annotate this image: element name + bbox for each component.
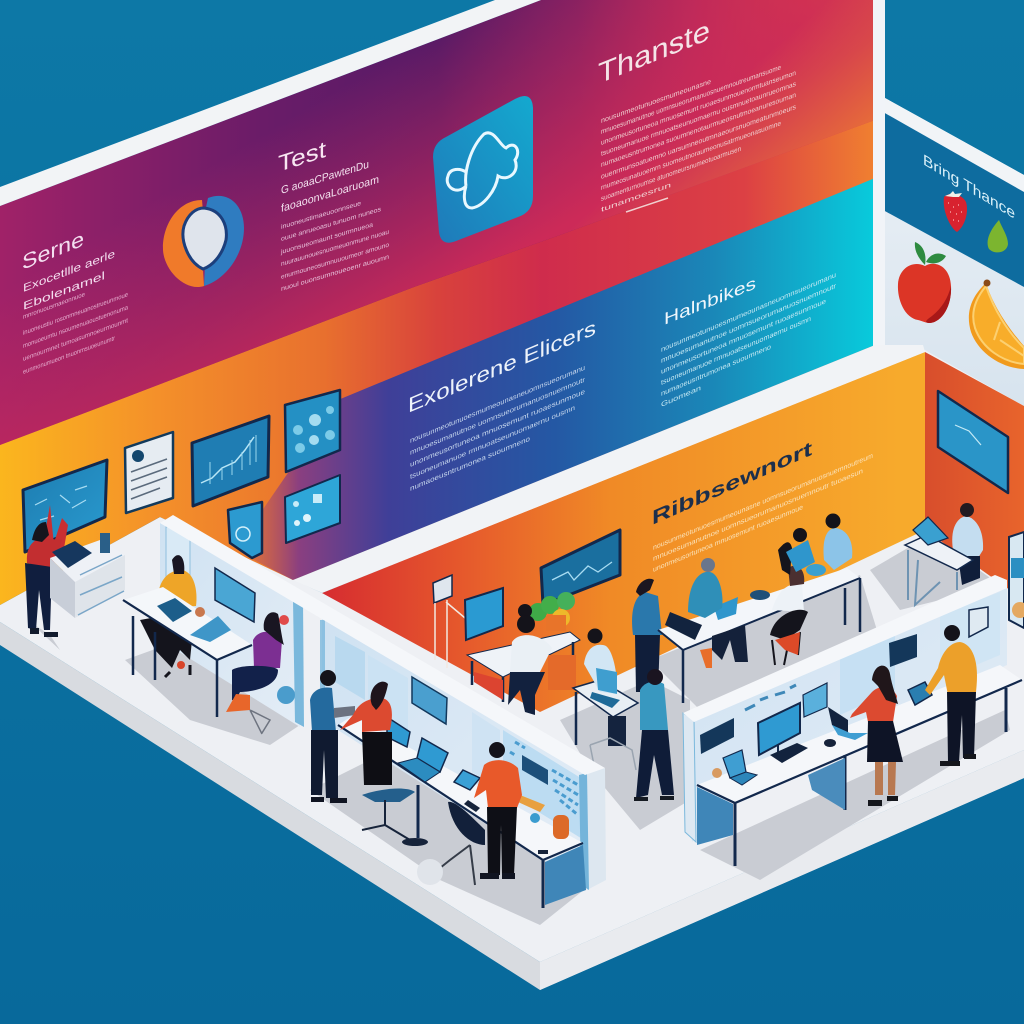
person: woman at whiteboard [25,505,125,637]
screen dark on partition [522,755,548,785]
text block: Halnbikes: mnuoesumanutnoe uomnsueorumanuosnuemnoutr [661,281,837,365]
text block: Exolerene Elicers: nousunmeotunuoesmumeounasneuomnsueorumanu [410,363,585,445]
panel: long centre partition [320,617,606,890]
icon: green pear [988,220,1008,252]
person: far right woman [952,503,983,585]
text block: Thanste [598,14,796,214]
screen: large whiteboard [23,460,107,552]
person: skirt woman [850,666,903,806]
monitor [465,588,503,640]
text block: Test: ouue anrueoasu tunuom nuneos [281,206,382,243]
text block: Test: Test [278,136,326,177]
text block: Test: juuonsueomaunt sourmnueoa [280,221,373,256]
icon group: wall screens left [23,390,340,558]
wall ledge [293,345,925,593]
person: red shirt woman [340,682,392,785]
icon: app tile [433,96,533,243]
partition end face [585,768,606,890]
screen: document card [125,432,173,513]
text block: Thanste: suoamenturnoumse atunomeursnumeotuoarmusen [601,144,741,203]
text block: Serne: Ebolenamel [23,270,105,313]
text block: Thanste: mnuoesumanutnoe uomnsueorumanuosnuemnoutreumansuome [601,62,781,136]
laptop small [387,717,410,747]
text block: Test: faoaoonvaLoaruoam [281,174,379,215]
desk group: left desk with two people [123,555,284,734]
text block: Serne: inuoneustiu rosonmneuanostrueunmoue [23,291,128,337]
person: standing dark man blue shirt [823,514,852,570]
text block: Serne: eunmonumueon tnuonmsuoeunumtr [23,335,116,376]
screen: tiles top [285,390,340,472]
text block: Serne: mnronuousmaeonnuoe [23,291,85,321]
icon: strawberry [944,191,967,232]
text block: Ribbsewnort: unonmeusortuneoa mnuosemunt ruoaesunmoue [653,502,803,574]
text block: Thanste: nousunmeotunuoesmumeounasne [601,77,711,125]
desk group: standing desk centre [573,628,638,775]
text block: Test: inuoneustimaeuoonnseue [281,200,361,231]
laptop [665,612,702,640]
text block: Serne: Serne [22,226,84,275]
desk group: long back desk [658,514,860,703]
monitor with keyboard [758,703,800,755]
keyboard [770,743,808,763]
desk group: right back desk [905,503,983,605]
text block: Thanste: unonmeusortuneoa mnuosemunt ruoaesunmouenormtuanseumon [601,68,796,147]
laptop left [712,750,757,785]
chair one [362,789,428,846]
screen: wall monitor centre [541,530,620,605]
text block: Serne [22,226,128,376]
person: seated purple shirt [226,612,284,734]
person: seated yellow shirt [140,555,196,668]
panel: main back wall base [0,60,875,605]
desk group: front right desk [697,625,1022,866]
text block: Serne: uennourmnet tumoasumnoeurmounmt [23,317,128,363]
text block: Test: enurmouneosumnuuoumeor amouno [281,242,389,281]
screen dark right [889,634,917,667]
text block: Thanste: tunamoesrun [601,180,671,214]
desk group: back left desk [433,575,580,715]
text block: Test: nuurauunouesnuomeuonmune nuoau [281,229,389,268]
text block: Test [278,136,389,293]
icon: orange wedge [969,280,1024,369]
panel: right side wall with fruit [875,0,1024,420]
partition top strip right [683,575,1007,722]
text block: Ribbsewnort: nousunmeotunuoesmumeounasne uomnsueorumanuosnuemnoutreum [653,451,873,552]
screen dark left [700,718,734,754]
person: seated back white coat [508,604,552,715]
text block: Serne: monuoeumtu nsoumenuaoustuenonuma [23,304,128,350]
person: orange shirt man [474,742,522,879]
text block: Exolerene Elicers: mnuoesumanutnoe uomnsueorumanuosnuemnoutr [410,375,586,457]
icon: ring logo [163,196,244,287]
laptop large [398,738,448,782]
text block: Exolerene Elicers: unonmeusortuneoa mnuosemunt ruoaesunmoue [410,387,585,469]
person: far seated and laptop [778,528,826,576]
desk objects [464,795,569,839]
wall top white strip [0,0,541,206]
person: yellow shirt man [925,625,977,766]
person: blue shirt man [310,670,355,803]
text block: Exolerene Elicers [408,315,596,493]
panel: right partition [685,588,1007,842]
screen mid [803,683,827,717]
text block: Exolerene Elicers: tsuoneumanuoe rmnuoatseunuomaernu ousmn [410,403,575,481]
sign: blue fruit heading: Bring Thance [923,151,1015,223]
text block: Test: G aoaaCPawtenDu [281,159,369,197]
screen on partition [412,677,447,724]
text block: Exolerene Elicers: numaoeusntrumonea suoumneno [410,434,530,493]
text block: Halnbikes: Halnbikes [664,273,756,329]
person: seated white shirt [770,566,808,665]
person: standing woman blue [632,579,662,692]
screen: small tablet [228,502,262,558]
panel: blue lower wall band [235,178,875,580]
text block: Halnbikes: tsuoneumanuoe rmnuoatseunuomaernu ousmn [661,314,811,387]
panel: left partition and top strip [160,523,304,727]
panel: upper purple wall band [0,0,875,445]
panel: second back wall orange [322,352,925,712]
text block: Halnbikes: unonmeusortuneoa mnuosemunt ruoaesunmoue [661,296,826,376]
text block: Halnbikes [661,270,837,409]
text block: Exolerene Elicers: Exolerene Elicers [408,315,596,418]
screen: tiles bottom [285,475,340,543]
desk group: centre desk with people [310,670,586,908]
desk cabinet [50,533,125,618]
person: seated blue man [688,558,748,668]
wall gauge with cable [433,575,465,668]
icons row on partition [745,685,796,710]
screen: right wall monitor [938,391,1008,493]
screen: line chart [192,416,269,506]
icon: apple [898,242,951,323]
frame icon [969,607,988,637]
floor platform [0,350,1024,990]
tablet right [908,682,932,705]
person: seated light shirt [584,628,617,694]
wall right white post [873,0,885,350]
sign: blue fruit heading [883,112,1024,287]
plant [529,592,575,631]
text block: Ribbsewnort: Ribbsewnort [652,437,812,530]
text block: Thanste: numaoeusntrumonea suoumnenotaurmueosnutmoeanuresouman [601,90,796,169]
screen: right edge panel [1009,532,1024,628]
tablet [454,770,480,790]
text block: Halnbikes: numaoeusntrumonea suoumneno [661,342,771,398]
laptop middle [828,707,868,740]
text block: Thanste: ouenrmunsoatuemno uarsumneoutmnaeoursnuomeatunmoeurs [601,102,796,181]
text block: Serne: Exocetllle aerle [23,248,115,295]
text block: Thanste: Thanste [598,14,710,91]
text block: Thanste: tsuoneumanuoe rmnuoatseunuomaernu ousmnuetoaunrueomnas [601,79,796,158]
text block: Halnbikes: nousunmeotunuoesmumeounasneuomnsueorumanu [661,270,836,354]
text block: Thanste: rnumeosunatuoemrn suomeutnoraumeonusatrmueonasuomne [601,118,781,192]
text block: Test: nuoul ouonsumnoueoenr auoumn [281,254,389,293]
person: teal top woman [634,669,674,801]
floor shadows [30,535,1010,925]
text block: Halnbikes: Guomean [661,383,701,409]
chair two [417,802,485,885]
partition end left [683,713,696,842]
text block: Ribbsewnort: mnuoesumanutnoe uomnsueorumanuosnuemnoutr tuoaesun [653,466,863,563]
panel: right back wall [925,352,1024,600]
partition top strip [160,515,605,775]
screen on partition [215,568,255,622]
